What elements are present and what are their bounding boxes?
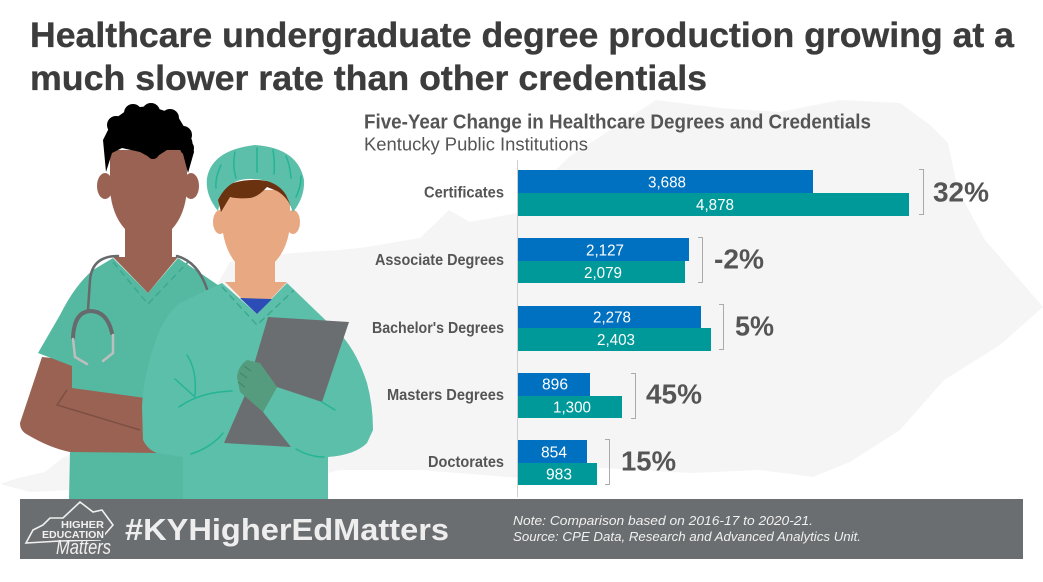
illustration: healthcare workers [20, 103, 373, 499]
row: Bachelor's Degrees [372, 304, 774, 351]
man: doctor with stethoscope [20, 103, 240, 499]
logo: Higher Education Matters: Matters [56, 537, 111, 559]
chart heading: Five-Year Change in Healthcare Degrees and Credentials [364, 112, 871, 134]
row: Masters Degrees [387, 373, 702, 418]
row: Masters Degrees: 1,300 [553, 400, 591, 416]
row: Bachelor's Degrees: 2,278 [593, 310, 631, 326]
row: Doctorates [428, 440, 676, 485]
chart heading: Kentucky Public Institutions [364, 134, 588, 154]
row: Doctorates: 983 [546, 466, 572, 484]
title: much slower rate than other credentials [30, 58, 707, 98]
row: Masters Degrees: 896 [542, 376, 568, 394]
woman: nurse with clipboard [142, 145, 373, 499]
source note [513, 514, 861, 544]
clipboard [224, 317, 349, 447]
row: Masters Degrees: 45% [646, 378, 702, 410]
row: Bachelor's Degrees: 5% [735, 310, 774, 342]
chart heading [364, 112, 871, 154]
bar chart [372, 160, 989, 497]
hair [218, 180, 294, 213]
logo: Higher Education Matters: HIGHER [61, 519, 104, 531]
row: Associate Degrees [375, 238, 764, 283]
source note: Source: CPE Data, Research and Advanced Analytics Unit. [513, 530, 861, 544]
surgical cap [207, 145, 304, 212]
row: Bachelor's Degrees: 2,403 [597, 332, 635, 349]
row: Certificates: Certificates [424, 184, 504, 202]
axis [516, 160, 518, 497]
row: Associate Degrees: Associate Degrees [375, 252, 504, 269]
row: Bachelor's Degrees: Bachelor's Degrees [372, 320, 504, 337]
row: Associate Degrees: -2% [714, 244, 764, 274]
hair [103, 103, 194, 173]
stethoscope [73, 256, 207, 364]
title: Healthcare undergraduate degree production growing at a [30, 15, 1014, 55]
title [30, 15, 1014, 98]
hashtag: #KYHigherEdMatters [125, 512, 449, 547]
source note: Note: Comparison based on 2016-17 to 2020-21. [513, 514, 813, 528]
row: Certificates: 4,878 [696, 197, 734, 214]
background: Kentucky map silhouette [0, 100, 1043, 492]
row: Doctorates: 854 [541, 444, 567, 462]
logo: Higher Education Matters: EDUCATION [42, 529, 104, 541]
row: Certificates [424, 170, 989, 216]
row: Certificates: 32% [933, 176, 989, 208]
glove [237, 360, 277, 412]
row: Doctorates: 15% [621, 446, 676, 476]
row: Masters Degrees: Masters Degrees [387, 387, 504, 404]
row: Associate Degrees: 2,127 [586, 242, 624, 260]
row: Certificates: 3,688 [648, 174, 686, 192]
logo: Higher Education Matters [26, 502, 113, 559]
row: Associate Degrees: 2,079 [584, 265, 622, 282]
row: Doctorates: Doctorates [428, 454, 504, 471]
footer band [20, 499, 1023, 559]
